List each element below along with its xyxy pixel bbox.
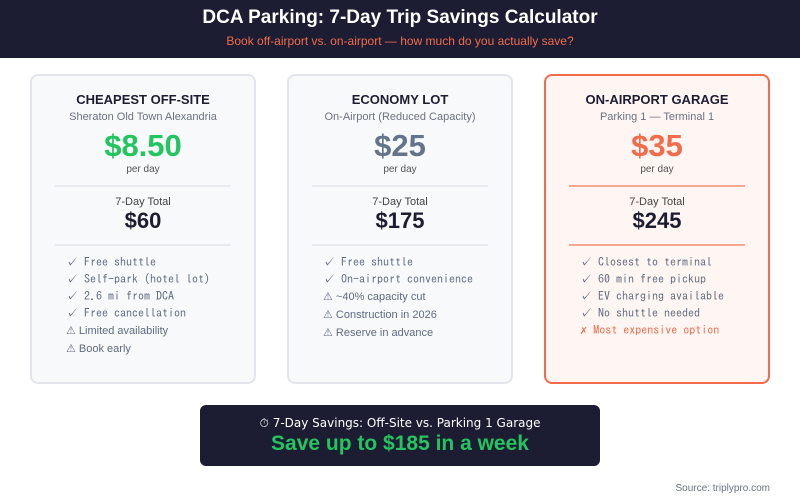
features xyxy=(323,256,473,339)
subtitle: Book off-airport vs. on-airport — how much do you actually save? xyxy=(226,34,574,48)
features: ⚠ Limited availability xyxy=(66,325,168,337)
panel: cheapest off-site xyxy=(30,74,256,384)
title: DCA Parking: 7-Day Trip Savings Calculator xyxy=(202,7,598,28)
panel: economy lot xyxy=(287,74,513,384)
features xyxy=(66,256,210,355)
total: $175 xyxy=(376,208,424,233)
price: $8.50 xyxy=(104,128,182,163)
features: ✓ Free shuttle xyxy=(66,256,156,268)
features: ✓ EV charging available xyxy=(580,290,724,302)
features: ✗ Most expensive option xyxy=(580,324,719,336)
features: ✓ On-airport convenience xyxy=(323,273,473,285)
features: ⚠ ~40% capacity cut xyxy=(323,291,426,303)
panel: on-airport garage xyxy=(544,74,770,384)
heading: ON-AIRPORT GARAGE xyxy=(586,92,728,107)
source: Source: triplypro.com xyxy=(676,483,770,494)
features: ✓ 2.6 mi from DCA xyxy=(66,290,174,302)
price: $35 xyxy=(631,128,683,163)
features: ⚠ Book early xyxy=(66,343,131,355)
panel: economy lot: On-Airport (Reduced Capacity) xyxy=(324,111,476,123)
features: ✓ No shuttle needed xyxy=(580,307,700,319)
header xyxy=(0,0,800,58)
panel: cheapest off-site: per day xyxy=(126,164,160,175)
features: ✓ Self-park (hotel lot) xyxy=(66,273,210,285)
features xyxy=(580,256,724,336)
features: ✓ Closest to terminal xyxy=(580,256,712,268)
panel: cheapest off-site: Sheraton Old Town Alexandria xyxy=(69,111,217,123)
banner headline: Save up to $185 in a week xyxy=(271,432,529,455)
panel: cheapest off-site: 7-Day Total xyxy=(115,196,171,208)
features: ⚠ Reserve in advance xyxy=(323,327,433,339)
features: ⚠ Construction in 2026 xyxy=(323,309,437,321)
savings banner xyxy=(200,405,600,466)
heading: CHEAPEST OFF-SITE xyxy=(76,92,210,107)
panel: economy lot: per day xyxy=(383,164,417,175)
heading: ECONOMY LOT xyxy=(352,92,448,107)
panel: on-airport garage: 7-Day Total xyxy=(629,196,685,208)
panel: on-airport garage: Parking 1 — Terminal 1 xyxy=(600,111,714,123)
panel: economy lot: 7-Day Total xyxy=(372,196,428,208)
total: $245 xyxy=(633,208,681,233)
total: $60 xyxy=(125,208,161,233)
banner label: ⏱ 7-Day Savings: Off-Site vs. Parking 1 Garage xyxy=(260,416,540,430)
features: ✓ Free cancellation xyxy=(66,307,186,319)
price: $25 xyxy=(374,128,426,163)
features: ✓ Free shuttle xyxy=(323,256,413,268)
features: ✓ 60 min free pickup xyxy=(580,273,706,285)
panel: on-airport garage: per day xyxy=(640,164,674,175)
